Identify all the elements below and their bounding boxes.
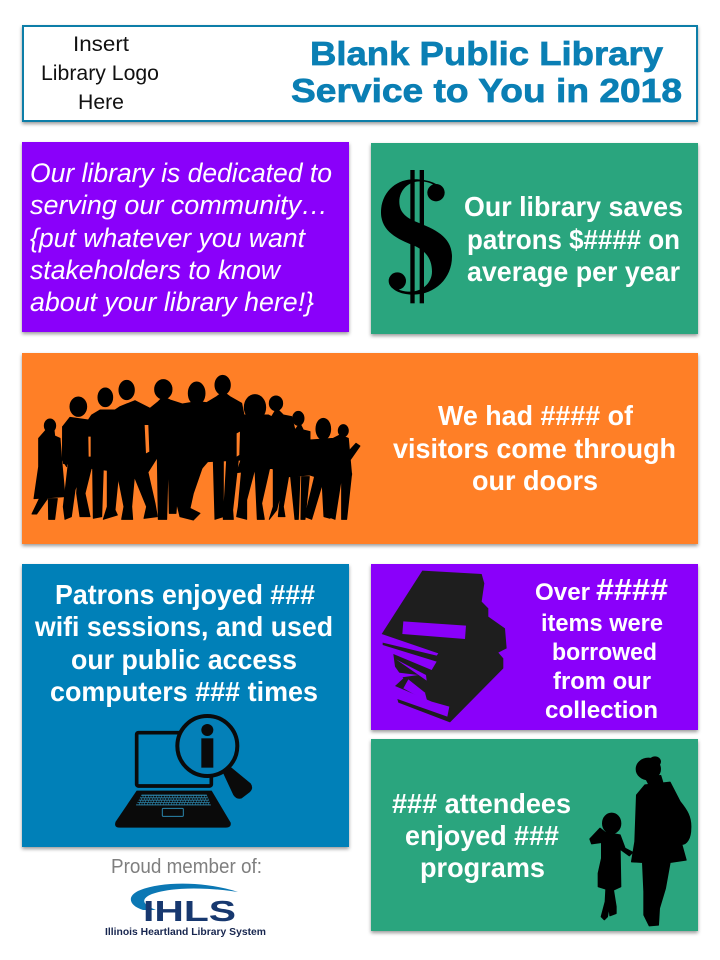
logo placeholder text: Insert: [73, 33, 129, 56]
savings text: Our library saves: [464, 191, 683, 222]
panel: programs: [371, 739, 698, 931]
icon: stack of books: [382, 571, 507, 722]
items text: [535, 572, 668, 724]
title: [291, 35, 682, 109]
panel: library mission statement: serving our community…: [30, 190, 328, 220]
icon: dollar sign: [381, 170, 452, 303]
logo: IHLS: [105, 884, 266, 938]
items text: collection: [545, 697, 658, 724]
icon: adult and child silhouette: [590, 757, 691, 926]
items text: items were: [541, 610, 663, 637]
savings text: patrons $#### on: [467, 224, 680, 255]
icon: laptop with magnifier: [115, 716, 252, 828]
programs text: programs: [420, 852, 545, 883]
visitors text: [393, 400, 676, 496]
member credit: Proud member of:: [111, 856, 262, 878]
panel: library mission statement: {put whatever you want: [30, 223, 306, 253]
panel: items borrowed: [371, 564, 698, 730]
panel: library mission statement: Our library is dedicated to: [30, 158, 332, 188]
items text: Over: [535, 579, 590, 606]
programs text: [392, 788, 571, 883]
wifi text: wifi sessions, and used: [34, 611, 333, 642]
panel: wifi and computers: [22, 564, 349, 847]
panel: savings: [371, 143, 698, 334]
wifi text: Patrons enjoyed ###: [55, 579, 315, 610]
savings text: [464, 191, 683, 287]
logo: IHLS: IHLS: [143, 896, 236, 928]
wifi text: [34, 579, 333, 707]
visitors text: We had #### of: [438, 400, 634, 431]
icon: crowd silhouette: [32, 375, 360, 520]
items text: ####: [596, 572, 668, 607]
logo: IHLS: Illinois Heartland Library System: [105, 926, 266, 938]
programs text: ### attendees: [392, 788, 571, 819]
visitors text: visitors come through: [393, 433, 676, 464]
logo placeholder text: [41, 33, 159, 114]
panel: library mission statement: [22, 142, 349, 332]
panel: library mission statement: stakeholders to know: [30, 255, 281, 285]
title: Service to You in 2018: [291, 72, 682, 109]
items text: from our: [553, 668, 651, 695]
title: Blank Public Library: [310, 35, 664, 72]
member credit: [105, 856, 266, 938]
programs text: enjoyed ###: [405, 820, 559, 851]
savings text: average per year: [467, 256, 680, 287]
panel: library mission statement: about your library here!}: [30, 287, 314, 317]
visitors text: our doors: [472, 465, 598, 496]
items text: borrowed: [552, 639, 657, 666]
wifi text: computers ### times: [50, 676, 318, 707]
panel: header: [23, 26, 697, 121]
logo placeholder text: Library Logo: [41, 62, 159, 85]
wifi text: our public access: [71, 644, 297, 675]
panel: visitors: [22, 353, 698, 544]
logo placeholder text: Here: [78, 91, 124, 114]
